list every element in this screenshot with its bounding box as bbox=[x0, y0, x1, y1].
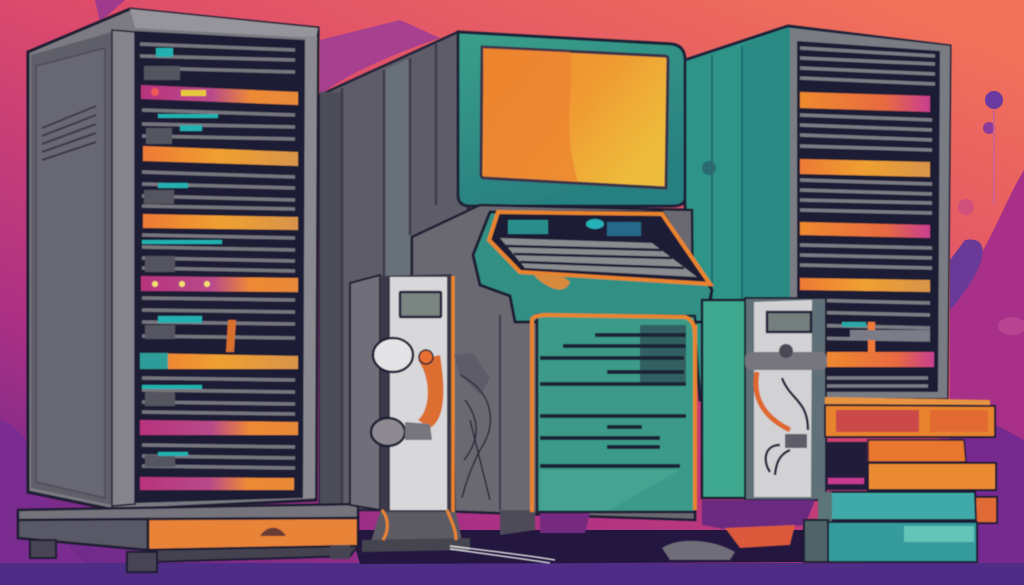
central cabinet bbox=[412, 205, 695, 535]
monitor bbox=[458, 32, 685, 206]
teal accents bbox=[142, 48, 222, 456]
orange drive bbox=[825, 397, 990, 405]
stand bbox=[370, 512, 462, 545]
server tower: grey back bbox=[320, 32, 470, 510]
small server: right bbox=[662, 298, 827, 560]
console vents bbox=[500, 238, 697, 277]
rack interior bbox=[797, 41, 940, 392]
robot arm bbox=[418, 355, 443, 428]
teal drawers bbox=[532, 315, 695, 512]
floor bbox=[0, 530, 1024, 585]
glowing strips bbox=[141, 85, 298, 105]
rack interior bbox=[135, 31, 305, 503]
orange box bbox=[868, 440, 966, 462]
teal rack: right bbox=[685, 26, 950, 400]
shelf lines bbox=[800, 48, 935, 386]
cables bbox=[460, 375, 490, 500]
orange book bbox=[868, 463, 996, 490]
teal books bbox=[965, 497, 997, 523]
background dots bbox=[958, 91, 1003, 215]
dark shelf faces bbox=[144, 66, 180, 467]
console bbox=[473, 212, 712, 322]
shelf lines bbox=[140, 44, 295, 468]
monitor screen bbox=[481, 47, 668, 188]
glowing strips bbox=[800, 92, 930, 112]
left rack bbox=[28, 9, 318, 510]
display bbox=[400, 292, 441, 317]
vent lines bbox=[42, 106, 96, 160]
stacked drives and books bbox=[804, 397, 997, 562]
small server: left bbox=[350, 274, 555, 563]
rack base bbox=[18, 504, 358, 572]
